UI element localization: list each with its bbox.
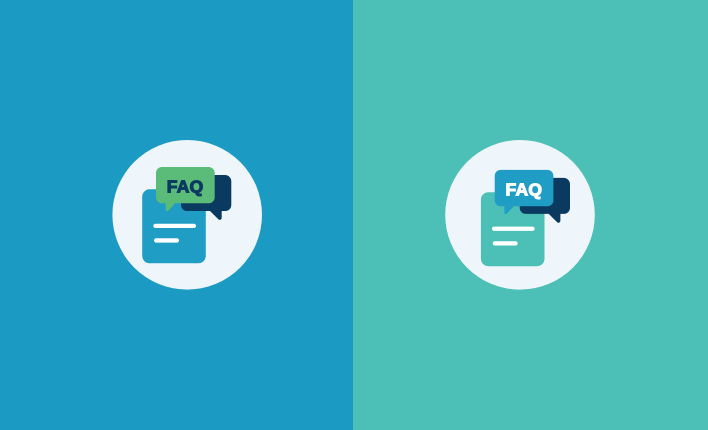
icon: left FAQ badge: [112, 140, 262, 290]
icon: right FAQ badge: [445, 140, 595, 290]
left dark speech bubble: [181, 175, 231, 220]
left document: [142, 189, 206, 263]
right document: [481, 192, 544, 266]
left green speech bubble with FAQ: FAQ: [167, 177, 204, 197]
panel: left blue background: [0, 0, 353, 430]
panel: right teal background: [353, 0, 708, 430]
right dark speech bubble: [520, 178, 570, 223]
left green speech bubble with FAQ: [156, 167, 215, 211]
right blue speech bubble with FAQ: FAQ: [506, 180, 542, 200]
right white circle: [445, 140, 595, 290]
left white circle: [112, 140, 262, 290]
right blue speech bubble with FAQ: [495, 170, 553, 214]
